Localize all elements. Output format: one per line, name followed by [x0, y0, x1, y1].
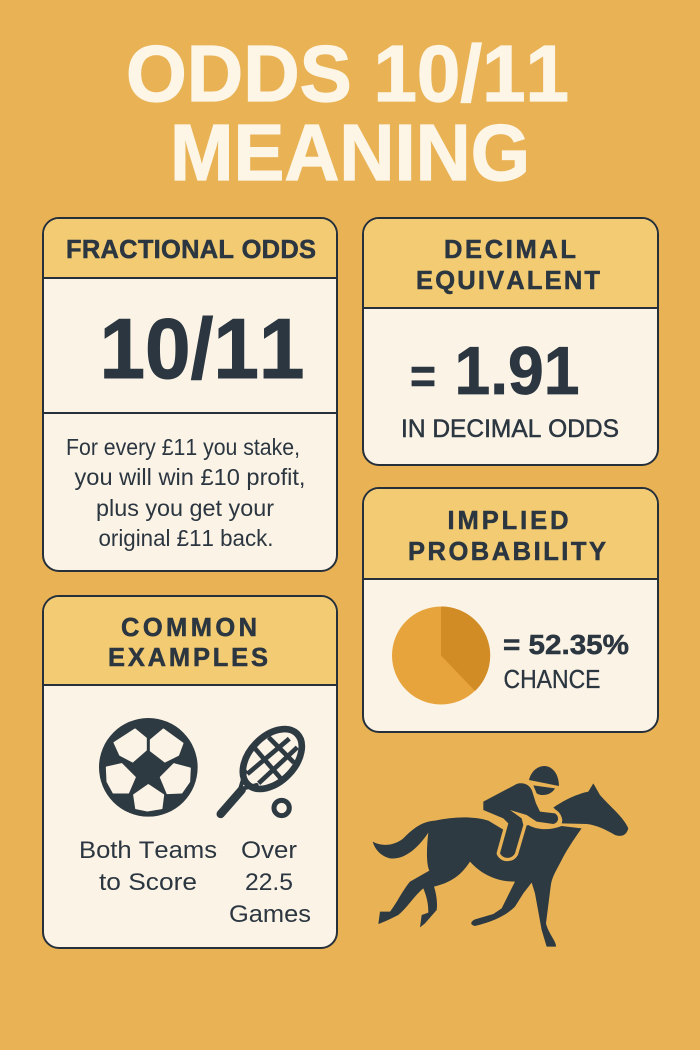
- explanation text: [66, 434, 306, 551]
- panel: common examples: COMMON: [121, 614, 257, 642]
- panel: fractional odds: FRACTIONAL ODDS: [66, 236, 316, 264]
- icon: tennis racket and ball: [221, 718, 313, 816]
- title: MEANING: [170, 108, 530, 197]
- pie chart: [392, 606, 490, 704]
- panel: decimal equivalent: 1.91: [454, 333, 580, 409]
- panel: implied probability: IMPLIED: [448, 507, 568, 535]
- probability value: = 52.35%: [503, 629, 629, 660]
- icon: horse and jockey: [373, 766, 628, 947]
- probability caption: CHANCE: [504, 666, 600, 694]
- decimal caption: IN DECIMAL ODDS: [401, 415, 619, 443]
- explanation text: original £11 back.: [98, 525, 274, 551]
- big fraction: 10/11: [100, 302, 304, 397]
- panel: decimal equivalent: EQUIVALENT: [416, 267, 600, 295]
- header: common examples: [44, 597, 336, 685]
- horse: [373, 817, 582, 947]
- jockey: [483, 783, 558, 858]
- title: ODDS 10/11: [126, 29, 569, 118]
- label: over 22.5 games: 22.5: [245, 869, 293, 896]
- label: over 22.5 games: [229, 837, 311, 928]
- title: [126, 29, 569, 197]
- icon: football: [99, 718, 198, 817]
- label: over 22.5 games: Games: [229, 901, 311, 928]
- decimal value: =: [410, 348, 436, 404]
- header: fractional odds: [44, 219, 336, 278]
- panel: implied probability: PROBABILITY: [408, 538, 606, 566]
- panel: implied probability: [363, 488, 658, 732]
- explanation text: you will win £10 profit,: [74, 464, 306, 490]
- header: decimal equivalent: [364, 219, 657, 308]
- explanation text: plus you get your: [96, 495, 274, 521]
- label: both teams to score: to Score: [99, 869, 197, 896]
- label: both teams to score: Both Teams: [79, 837, 217, 864]
- panel: common examples: EXAMPLES: [108, 644, 268, 672]
- label: over 22.5 games: Over: [241, 837, 297, 864]
- label: both teams to score: [79, 837, 217, 896]
- panel: fractional odds: [43, 218, 337, 571]
- panel: decimal equivalent: DECIMAL: [444, 236, 576, 264]
- panel: decimal equivalent: [363, 218, 658, 465]
- header: implied probability: [364, 489, 657, 579]
- panel: common examples: [43, 596, 337, 948]
- explanation text: For every £11 you stake,: [66, 434, 300, 460]
